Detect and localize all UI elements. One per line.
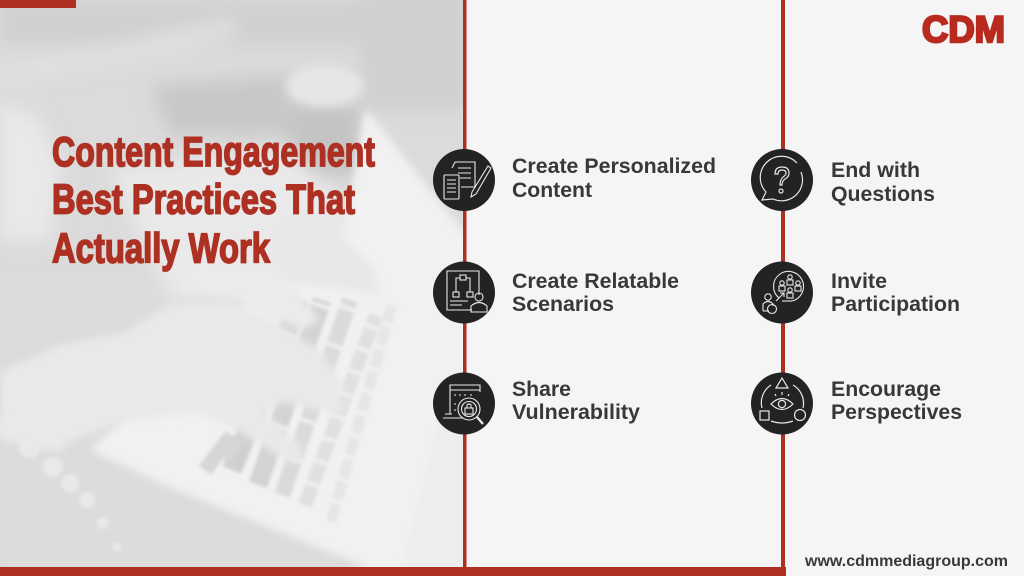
item: Create Relatable Scenarios	[433, 262, 679, 324]
item: Share Vulnerability	[433, 372, 640, 434]
icon: screen with padlock under magnifier	[433, 372, 495, 434]
label: Participation	[831, 292, 960, 316]
label	[512, 154, 716, 202]
icon: speech bubble with question mark	[751, 149, 813, 211]
left vertical timeline line	[463, 0, 466, 570]
icon: document and pen	[433, 149, 495, 211]
label: Create Relatable	[512, 269, 679, 293]
label	[512, 377, 640, 424]
item: Invite Participation	[751, 262, 960, 324]
label	[512, 269, 679, 316]
label: Scenarios	[512, 292, 614, 316]
icon: eye among triangle, square and circle	[751, 372, 813, 434]
item: Encourage Perspectives	[751, 372, 962, 434]
label: Invite	[831, 269, 887, 293]
icon: group of people and invited person	[751, 262, 813, 324]
keyboard keys	[205, 300, 392, 522]
item: Create Personalized Content	[433, 149, 716, 211]
label: Perspectives	[831, 400, 962, 424]
top-left accent bar	[0, 0, 76, 8]
typing hand	[1, 251, 372, 457]
bottom accent bar	[0, 567, 786, 576]
label: End with	[831, 158, 920, 182]
label: Questions	[831, 182, 935, 206]
icon: flowchart and person	[433, 262, 495, 324]
label	[831, 158, 935, 206]
title: Best Practices That	[52, 176, 355, 222]
label	[831, 269, 960, 316]
label	[831, 377, 962, 424]
CDM logo: CDM	[922, 9, 1005, 50]
item: End with Questions	[751, 149, 935, 211]
label: Share	[512, 377, 571, 401]
title	[52, 128, 375, 272]
faded photo of hands typing on a laptop	[0, 0, 470, 576]
website URL: www.cdmmediagroup.com	[804, 553, 1008, 570]
label: Encourage	[831, 377, 941, 401]
title: Actually Work	[52, 224, 271, 272]
label: Create Personalized	[512, 154, 716, 178]
label: Content	[512, 178, 592, 202]
right vertical timeline line	[781, 0, 785, 570]
title: Content Engagement	[52, 128, 375, 175]
label: Vulnerability	[512, 400, 640, 424]
bracelet beads	[20, 446, 120, 550]
